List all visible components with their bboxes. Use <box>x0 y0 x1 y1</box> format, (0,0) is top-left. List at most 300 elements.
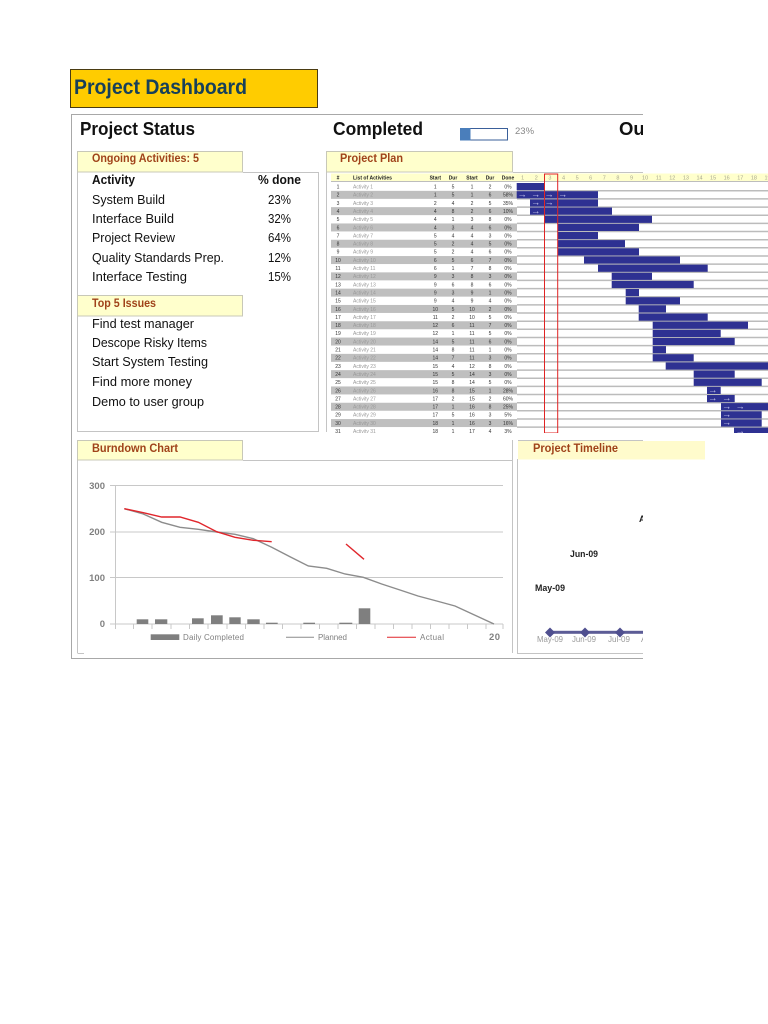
activity table: System Build <box>92 192 165 207</box>
table rows: 0% <box>504 266 512 272</box>
table rows: 2 <box>452 250 455 256</box>
table rows: 1 <box>471 184 474 190</box>
table rows: 0% <box>504 331 512 337</box>
issues list: Find more money <box>92 374 192 389</box>
table rows: Activity 24 <box>353 372 376 378</box>
activity table: Interface Build <box>92 211 174 226</box>
table rows: 6 <box>489 339 492 345</box>
progress arrows: → <box>736 401 745 412</box>
table rows: 4 <box>471 250 474 256</box>
issues list: Find test manager <box>92 316 195 331</box>
table rows: 12 <box>433 323 438 329</box>
table rows: 6 <box>337 225 340 231</box>
y axis labels: 300 <box>89 481 105 492</box>
table rows: 8 <box>337 242 340 248</box>
table rows: 0% <box>504 250 512 256</box>
daily completed bars <box>137 608 370 624</box>
table rows: 17 <box>433 413 438 419</box>
table rows: Activity 26 <box>353 388 376 394</box>
table rows: 16 <box>335 307 341 313</box>
table rows: 2 <box>489 184 492 190</box>
table rows: Activity 16 <box>353 307 376 313</box>
table rows: Activity 4 <box>353 209 373 215</box>
milestone labels: A <box>639 514 646 524</box>
table rows: 2 <box>452 396 455 402</box>
table rows: Activity 14 <box>353 290 376 296</box>
table rows: Activity 12 <box>353 274 376 280</box>
table header row: 1 <box>521 176 524 182</box>
panel: project timeline <box>518 440 705 654</box>
table rows: Activity 5 <box>353 217 373 223</box>
table rows: 14 <box>433 339 438 345</box>
table rows: 9 <box>434 290 437 296</box>
table rows: 29 <box>335 413 341 419</box>
progress arrows: → <box>722 393 732 404</box>
table rows: 25% <box>503 405 514 411</box>
table rows: 5 <box>452 258 455 264</box>
table rows: 0% <box>504 225 512 231</box>
table rows: 17 <box>433 405 438 411</box>
axis labels <box>538 636 643 644</box>
table rows: 8 <box>489 364 492 370</box>
dashboard frame <box>72 114 643 658</box>
table rows: 23 <box>335 364 341 370</box>
header: project plan: Project Plan <box>340 153 403 165</box>
axis labels: A <box>641 634 647 644</box>
table rows: 12 <box>335 274 341 280</box>
table rows: 5 <box>489 242 492 248</box>
heading: outstanding, clipped: Ou <box>619 118 645 139</box>
axis labels: Jun-09 <box>572 634 596 644</box>
table rows: 11 <box>469 356 475 362</box>
axis labels: May-09 <box>537 634 563 644</box>
header: burndown chart: Burndown Chart <box>92 443 178 455</box>
progress arrows: → <box>531 198 540 209</box>
table rows: 4 <box>489 429 492 435</box>
table rows: 0% <box>504 282 512 288</box>
table rows: 11 <box>469 331 475 337</box>
table rows: 17 <box>433 396 438 402</box>
issues list <box>92 316 208 409</box>
table rows: 15 <box>469 388 475 394</box>
table rows: Activity 22 <box>353 356 376 362</box>
table header row: 16 <box>724 176 730 182</box>
table rows: 4 <box>471 225 474 231</box>
timeline axis <box>550 631 643 634</box>
table rows: 0% <box>504 242 512 248</box>
table rows: 5 <box>489 315 492 321</box>
table rows: 2 <box>489 396 492 402</box>
table rows: 3 <box>489 413 492 419</box>
table rows: 14 <box>469 380 475 386</box>
activity table: Interface Testing <box>92 269 187 284</box>
table rows: Activity 18 <box>353 323 376 329</box>
table rows: 15 <box>469 396 475 402</box>
table rows: 3 <box>337 201 340 207</box>
table rows: 8 <box>452 388 455 394</box>
table rows: 5 <box>434 250 437 256</box>
table rows: Activity 15 <box>353 299 376 305</box>
table rows: 21 <box>335 348 341 354</box>
table rows: 6 <box>489 225 492 231</box>
milestone labels: May-09 <box>535 583 565 593</box>
table rows: 11 <box>469 323 475 329</box>
table rows: Activity 20 <box>353 339 376 345</box>
table rows: 5 <box>337 217 340 223</box>
table rows: Activity 25 <box>353 380 376 386</box>
y axis labels: 0 <box>100 619 105 630</box>
table rows: 0% <box>504 274 512 280</box>
legend: Planned <box>318 633 347 642</box>
table rows: 7 <box>489 258 492 264</box>
table rows: 8 <box>471 274 474 280</box>
table rows: 3 <box>452 274 455 280</box>
table rows: 25 <box>335 380 341 386</box>
heading: project status: Project Status <box>80 118 195 139</box>
axes and gridlines <box>110 485 503 629</box>
table rows: 12 <box>433 331 438 337</box>
table rows: 8 <box>471 282 474 288</box>
table rows: 4 <box>337 209 340 215</box>
table rows: 3 <box>452 225 455 231</box>
table rows: 27 <box>335 396 341 402</box>
progress arrows: → <box>544 198 554 209</box>
table rows: 7 <box>337 233 340 239</box>
legend: Daily Completed <box>183 633 244 642</box>
panel: burndown chart <box>78 440 512 654</box>
table rows: 1 <box>452 421 455 427</box>
header: top 5 issues <box>78 296 242 316</box>
table rows: 3 <box>489 372 492 378</box>
table header row: 5 <box>576 176 579 182</box>
table rows: 0% <box>504 184 512 190</box>
table rows: 0% <box>504 339 512 345</box>
activity table: % done <box>258 172 301 187</box>
panel: project plan <box>326 152 768 437</box>
table rows: 14 <box>433 356 438 362</box>
progress bar <box>460 126 535 140</box>
table rows: 0% <box>504 372 512 378</box>
table rows: 20 <box>335 339 341 345</box>
milestone labels <box>535 514 646 593</box>
table header row: 17 <box>737 176 743 182</box>
table rows: 15 <box>335 299 341 305</box>
table rows: Activity 1 <box>353 184 373 190</box>
table rows: 4 <box>434 225 437 231</box>
table rows: 8 <box>489 217 492 223</box>
table rows: 6 <box>489 250 492 256</box>
gantt row lines <box>517 191 768 427</box>
table header row: Start <box>430 176 441 182</box>
table rows: 6 <box>489 193 492 199</box>
legend: Actual <box>420 633 444 642</box>
table rows: 19 <box>335 331 341 337</box>
table rows: 12 <box>469 364 475 370</box>
header: top 5 issues: Top 5 Issues <box>92 298 156 310</box>
table rows: 9 <box>434 274 437 280</box>
progress arrows: → <box>531 190 540 200</box>
activity table: 15% <box>268 269 291 284</box>
table rows: 5 <box>434 233 437 239</box>
actual line <box>124 509 272 542</box>
table rows: 8 <box>452 348 455 354</box>
table rows: 24 <box>335 372 341 378</box>
plan table and gantt chart <box>331 174 768 437</box>
table rows: 3 <box>489 233 492 239</box>
table rows: 0% <box>504 315 512 321</box>
table header row: Dur <box>449 176 457 182</box>
table rows: 0% <box>504 348 512 354</box>
table header row <box>331 174 768 182</box>
table rows: 14 <box>469 372 475 378</box>
table rows: 4 <box>471 242 474 248</box>
header: ongoing activities <box>78 152 242 172</box>
table rows: Activity 19 <box>353 331 376 337</box>
table rows: 8 <box>489 405 492 411</box>
table rows: 3 <box>489 421 492 427</box>
table rows: 4 <box>434 217 437 223</box>
table rows: 0% <box>504 356 512 362</box>
table rows: Activity 17 <box>353 315 376 321</box>
table header row: 10 <box>642 176 648 182</box>
table rows: 28 <box>335 405 341 411</box>
table header row: 8 <box>616 176 619 182</box>
panel: ongoing activities and top issues <box>78 152 318 432</box>
activity table: 12% <box>268 250 291 265</box>
table rows: 5 <box>452 413 455 419</box>
table rows: 4 <box>489 299 492 305</box>
activity table: Quality Standards Prep. <box>92 250 224 265</box>
table rows: Activity 13 <box>353 282 376 288</box>
legend: 20 <box>489 632 500 643</box>
heading: completed: Completed <box>333 118 423 139</box>
table rows: 0% <box>504 364 512 370</box>
table rows: 14 <box>433 348 438 354</box>
table rows: 22 <box>335 356 341 362</box>
table rows: 10 <box>335 258 341 264</box>
table header row: 4 <box>562 176 565 182</box>
issues list: Descope Risky Items <box>92 335 207 350</box>
y axis labels: 200 <box>89 527 105 538</box>
table rows: 1 <box>489 348 492 354</box>
table rows: 2 <box>489 307 492 313</box>
table rows: 3 <box>452 290 455 296</box>
progress arrows <box>518 190 745 437</box>
table rows: 2 <box>434 201 437 207</box>
table rows: 4 <box>471 233 474 239</box>
title banner: Project Dashboard <box>74 76 247 99</box>
table rows: 3 <box>471 217 474 223</box>
table header row: 11 <box>656 176 662 182</box>
table rows: 16 <box>469 405 475 411</box>
header: project plan <box>326 152 512 172</box>
table rows: Activity 28 <box>353 405 376 411</box>
timeline chart <box>535 514 647 644</box>
table rows: 8 <box>452 380 455 386</box>
progress arrows: → <box>736 426 745 437</box>
progress arrows: → <box>722 401 732 412</box>
progress arrows: → <box>518 190 527 200</box>
table rows: 0% <box>504 217 512 223</box>
table rows: 5 <box>452 339 455 345</box>
table rows: Activity 23 <box>353 364 376 370</box>
title banner <box>70 70 318 108</box>
table rows: 11 <box>469 348 475 354</box>
table rows: 4 <box>452 233 455 239</box>
table rows: 16 <box>469 413 475 419</box>
table rows: 4 <box>434 209 437 215</box>
table header row: 13 <box>683 176 689 182</box>
table rows: 1 <box>452 429 455 435</box>
table rows: 6 <box>452 282 455 288</box>
header: project timeline: Project Timeline <box>533 443 618 455</box>
table rows: 1 <box>489 388 492 394</box>
table header row: 18 <box>751 176 757 182</box>
activity table: Activity <box>92 172 136 187</box>
table rows: 5 <box>489 201 492 207</box>
table rows: 0% <box>504 299 512 305</box>
table rows: 5 <box>452 307 455 313</box>
table rows: 3 <box>489 356 492 362</box>
table rows: Activity 31 <box>353 429 376 435</box>
table rows: 5 <box>452 372 455 378</box>
activity table: 23% <box>268 192 291 207</box>
table rows: 6 <box>452 323 455 329</box>
issues list: Start System Testing <box>92 354 208 369</box>
table header row: 3 <box>548 176 551 182</box>
table rows: 2 <box>452 315 455 321</box>
table rows: 2 <box>471 201 474 207</box>
table rows: 1 <box>452 405 455 411</box>
activity table: 64% <box>268 230 291 245</box>
table rows: Activity 29 <box>353 413 376 419</box>
table header row: List of Activities <box>353 176 392 182</box>
table rows: 1 <box>452 331 455 337</box>
table rows: 7 <box>471 266 474 272</box>
table rows: Activity 30 <box>353 421 376 427</box>
table rows: 18 <box>433 429 438 435</box>
table rows: 0% <box>504 290 512 296</box>
table header row: 9 <box>630 176 633 182</box>
progress arrows: → <box>722 410 732 420</box>
table rows: Activity 21 <box>353 348 376 354</box>
table rows: 1 <box>471 193 474 199</box>
table header row: 6 <box>589 176 592 182</box>
table rows: 11 <box>335 266 341 272</box>
table rows: 7 <box>489 323 492 329</box>
table header row: # <box>337 176 340 182</box>
table header row: 2 <box>535 176 538 182</box>
table rows: Activity 8 <box>353 242 373 248</box>
table rows: 10% <box>503 209 514 215</box>
table rows: 16% <box>503 421 514 427</box>
activity table <box>92 172 301 284</box>
table rows: 6 <box>489 282 492 288</box>
current week marker <box>544 174 558 433</box>
table rows: 58% <box>503 193 514 199</box>
table rows: 31 <box>335 429 341 435</box>
table rows: 0% <box>504 380 512 386</box>
table header row: 14 <box>696 176 703 182</box>
table rows: 1 <box>337 184 340 190</box>
table rows: 30 <box>335 421 341 427</box>
milestone labels: Jun-09 <box>570 549 598 559</box>
y axis labels: 100 <box>89 573 105 584</box>
burndown plot <box>89 481 503 643</box>
table rows: 0% <box>504 233 512 239</box>
progress arrows: → <box>544 190 554 200</box>
table rows: 15 <box>433 364 438 370</box>
table rows: 60% <box>503 396 514 402</box>
table rows: 18 <box>433 421 438 427</box>
table rows: 3% <box>504 429 512 435</box>
progress arrows: → <box>722 418 732 429</box>
planned line <box>124 509 494 624</box>
table rows: 16 <box>433 388 438 394</box>
header: burndown chart <box>78 440 512 460</box>
progress arrows: → <box>708 393 718 404</box>
table rows: 3 <box>489 274 492 280</box>
table rows: 9 <box>471 290 474 296</box>
actual line second segment <box>346 544 364 559</box>
table rows: 15 <box>433 380 438 386</box>
activity table: Project Review <box>92 230 176 245</box>
table rows: 4 <box>452 201 455 207</box>
milestone diamonds <box>545 628 625 638</box>
table rows: 5 <box>434 242 437 248</box>
table rows: Activity 7 <box>353 233 373 239</box>
table rows: 0% <box>504 323 512 329</box>
axis labels: Jul-09 <box>608 634 630 644</box>
y axis labels <box>89 481 105 630</box>
table rows: 11 <box>469 339 475 345</box>
header: ongoing activities: Ongoing Activities: 5 <box>92 153 200 165</box>
progress arrows: → <box>558 190 568 200</box>
table rows: 18 <box>335 323 341 329</box>
table rows: 10 <box>469 307 475 313</box>
table rows: 9 <box>434 299 437 305</box>
table rows: 6 <box>434 258 437 264</box>
table rows: 11 <box>433 315 438 321</box>
table rows: 6 <box>434 266 437 272</box>
table rows: 17 <box>469 429 475 435</box>
table header row: 7 <box>603 176 606 182</box>
table rows: 2 <box>471 209 474 215</box>
gantt bars <box>517 183 768 435</box>
table rows: 10 <box>469 315 475 321</box>
table rows: 7 <box>452 356 455 362</box>
table rows: 16 <box>469 421 475 427</box>
table rows: 14 <box>335 290 341 296</box>
table rows: 4 <box>452 299 455 305</box>
table rows: 1 <box>452 217 455 223</box>
legend <box>151 632 500 643</box>
table rows: 2 <box>337 193 340 199</box>
table header row: 12 <box>669 176 675 182</box>
table header row: Dur <box>486 176 494 182</box>
table rows: 6 <box>489 209 492 215</box>
table rows: 4 <box>452 364 455 370</box>
table rows: 1 <box>434 193 437 199</box>
table rows: 9 <box>434 282 437 288</box>
table rows: 0% <box>504 258 512 264</box>
table header row: Done <box>502 176 514 182</box>
table rows: Activity 9 <box>353 250 373 256</box>
table rows: 2 <box>452 242 455 248</box>
table rows: 8 <box>452 209 455 215</box>
table rows: 35% <box>503 201 514 207</box>
table rows: 17 <box>335 315 341 321</box>
